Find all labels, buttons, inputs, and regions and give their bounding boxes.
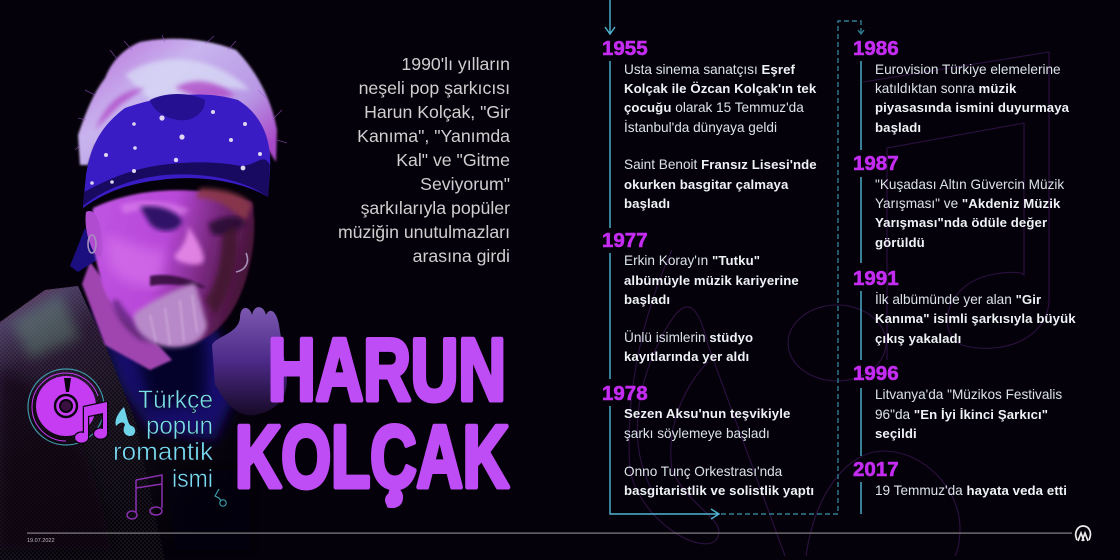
timeline column: 1986 to 2017: İlk albümünde yer alan "Gir [875,292,1041,307]
timeline column: 1955 to 1978: Usta sinema sanatçısı Eşref [624,62,796,77]
date: 19.07.2022 [27,538,55,544]
intro paragraph: neşeli pop şarkıcısı [359,78,510,98]
timeline column: 1986 to 2017: 1991 [853,267,899,290]
timeline column: 1986 to 2017: 19 Temmuz'da hayata veda etti [875,483,1067,498]
icon: vinyl disc with notes [28,369,107,445]
timeline column: 1986 to 2017: başladı [875,120,921,135]
timeline column: 1986 to 2017: "Kuşadası Altın Güvercin Müzik [875,177,1064,192]
timeline column: 1986 to 2017 [853,37,1076,498]
goatee beard [134,283,207,347]
ear flap [70,228,100,272]
bandana [83,94,270,208]
timeline column: 1955 to 1978: şarkı söylemeye başladı [624,426,770,441]
hand [212,307,287,415]
timeline column: 1955 to 1978: Sezen Aksu'nun teşvikiyle [624,406,790,421]
timeline column: 1955 to 1978: başladı [624,292,670,307]
timeline column: 1986 to 2017: Yarışması" ve "Akdeniz Müzik [875,196,1061,211]
timeline column: 1955 to 1978: çocuğu olarak 15 Temmuz'da [624,100,804,115]
timeline column: 1986 to 2017: Kanıma" isimli şarkısıyla büyük [875,311,1076,326]
intro paragraph: Kal" ve "Gitme [396,150,510,170]
intro paragraph: arasına girdi [413,246,510,266]
timeline column: 1955 to 1978: başladı [624,196,670,211]
tagline: Türkçe [138,386,213,414]
intro paragraph: müziğin unutulmazları [338,222,510,242]
timeline column: 1955 to 1978: albümüyle müzik kariyerine [624,273,799,288]
background: faint music notes [629,52,1049,556]
face [92,190,254,345]
timeline column: 1986 to 2017: çıkış yakaladı [875,331,961,346]
timeline column: 1955 to 1978: İstanbul'da dünyaya geldi [624,120,777,135]
timeline column: 1986 to 2017: 1996 [853,362,899,385]
tagline: ismi [172,465,213,493]
body and mesh shirt [0,286,262,560]
facial shading [105,188,252,346]
title: Harun Kolçak [235,320,509,508]
tagline [113,386,214,493]
icon: AA logo [1076,526,1090,541]
footer line [27,532,1072,534]
tagline: romantik [113,438,214,466]
timeline column: 1986 to 2017: 1987 [853,152,899,175]
timeline column: 1986 to 2017: Yarışması"nda ödüle değer [875,215,1047,230]
intro paragraph [338,54,510,266]
icon: cyan note [115,407,135,436]
timeline column: 1986 to 2017: Litvanya'da "Müzikos Festivalis [875,387,1062,402]
timeline column: 1986 to 2017: 96"da "En İyi İkinci Şarkıcı" [875,407,1048,422]
timeline column: 1955 to 1978: Saint Benoit Fransız Lisesi'nde [624,157,817,172]
title: Harun Kolçak: KOLÇAK [235,407,509,506]
timeline column: 1955 to 1978: Kolçak ile Özcan Kolçak'ın tek [624,81,817,96]
intro paragraph: Harun Kolçak, "Gir [364,102,510,122]
timeline column: 1955 to 1978: 1977 [602,229,648,252]
timeline column: 1955 to 1978: okurken basgitar çalmaya [624,177,789,192]
icon: purple outline notes [127,475,162,519]
timeline column: 1986 to 2017: 2017 [853,458,899,481]
intro paragraph: Kanıma", "Yanımda [357,126,510,146]
ear [85,211,103,257]
intro paragraph: 1990'lı yılların [401,54,510,74]
timeline column: 1955 to 1978: basgitaristlik ve solistlik yaptı [624,483,814,498]
timeline column: 1986 to 2017: görüldü [875,235,925,250]
intro paragraph: şarkılarıyla popüler [361,198,510,218]
timeline column: 1955 to 1978: Ünlü isimlerin stüdyo [624,330,753,345]
timeline column: 1986 to 2017: 1986 [853,37,899,60]
timeline column: 1986 to 2017: seçildi [875,426,917,441]
tagline: popun [146,412,213,440]
timeline column: 1986 to 2017: katıldıktan sonra müzik [875,81,1017,96]
timeline column: 1955 to 1978: Erkin Koray'ın "Tutku" [624,253,760,268]
timeline column: 1955 to 1978: 1955 [602,37,648,60]
timeline column: 1986 to 2017: piyasasında ismini duyurmaya [875,100,1070,115]
timeline connectors [605,0,864,519]
timeline column: 1986 to 2017: Eurovision Türkiye elemelerine [875,62,1061,77]
icon: small note outline [215,489,226,506]
intro paragraph: Seviyorum" [420,174,510,194]
photo: Harun Kolçak portrait [0,35,287,560]
timeline column: 1955 to 1978: 1978 [602,382,648,405]
neck scarf [82,262,172,370]
hair [75,35,287,165]
timeline column: 1955 to 1978: kayıtlarında yer aldı [624,349,749,364]
timeline column: 1955 to 1978 [602,37,817,498]
earrings [88,235,248,272]
title: Harun Kolçak: HARUN [268,320,506,419]
timeline column: 1955 to 1978: Onno Tunç Orkestrası'nda [624,464,783,479]
